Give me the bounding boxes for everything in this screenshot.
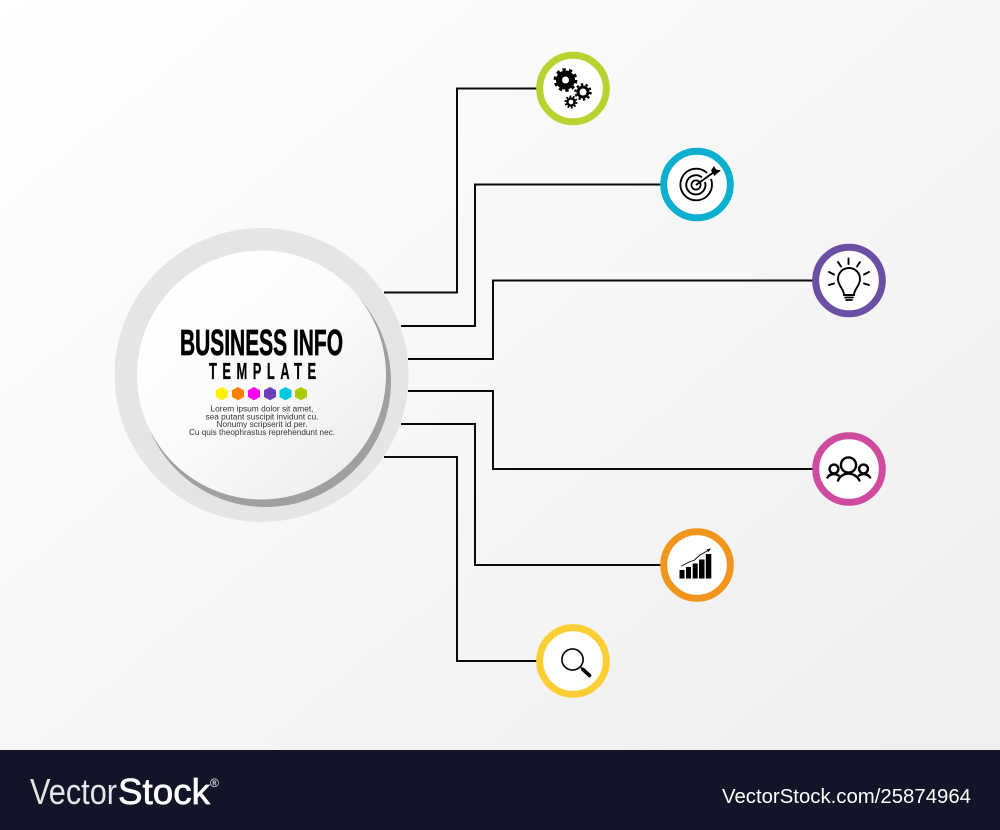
body text: Nonumy scripserit id per. bbox=[216, 420, 308, 429]
colored hexagon row bbox=[216, 387, 307, 400]
title: BUSINESS INFO bbox=[180, 322, 343, 363]
node: light bulb bbox=[816, 247, 882, 314]
icon: magnifying glass bbox=[562, 649, 590, 676]
icon: target with arrow bbox=[680, 166, 721, 200]
node: target bbox=[664, 151, 730, 218]
registered mark: ® bbox=[210, 776, 219, 790]
subtitle: TEMPLATE bbox=[209, 359, 322, 385]
footer logo: Stock bbox=[118, 771, 211, 812]
footer logo bbox=[30, 771, 211, 812]
icon: bar chart with trend arrow bbox=[680, 548, 711, 578]
footer id: VectorStock.com/25874964 bbox=[722, 786, 971, 808]
body text bbox=[189, 404, 335, 437]
icon: people group bbox=[828, 457, 870, 480]
footer logo: Vector bbox=[30, 771, 117, 812]
icon: gears bbox=[555, 70, 591, 108]
node: magnifier bbox=[540, 628, 606, 694]
body text: Cu quis theophrastus reprehendunt nec. bbox=[189, 428, 335, 437]
node: people bbox=[816, 436, 882, 502]
body text: Lorem ipsum dolor sit amet, bbox=[210, 404, 314, 414]
footer bar bbox=[0, 750, 1000, 830]
node: gears bbox=[540, 55, 606, 122]
central circle badge bbox=[114, 228, 408, 522]
connector lines bbox=[384, 88, 813, 661]
node: growth chart bbox=[664, 532, 730, 598]
icon: light bulb bbox=[829, 258, 869, 300]
body text: sea putant suscipit invidunt cu. bbox=[206, 412, 318, 421]
